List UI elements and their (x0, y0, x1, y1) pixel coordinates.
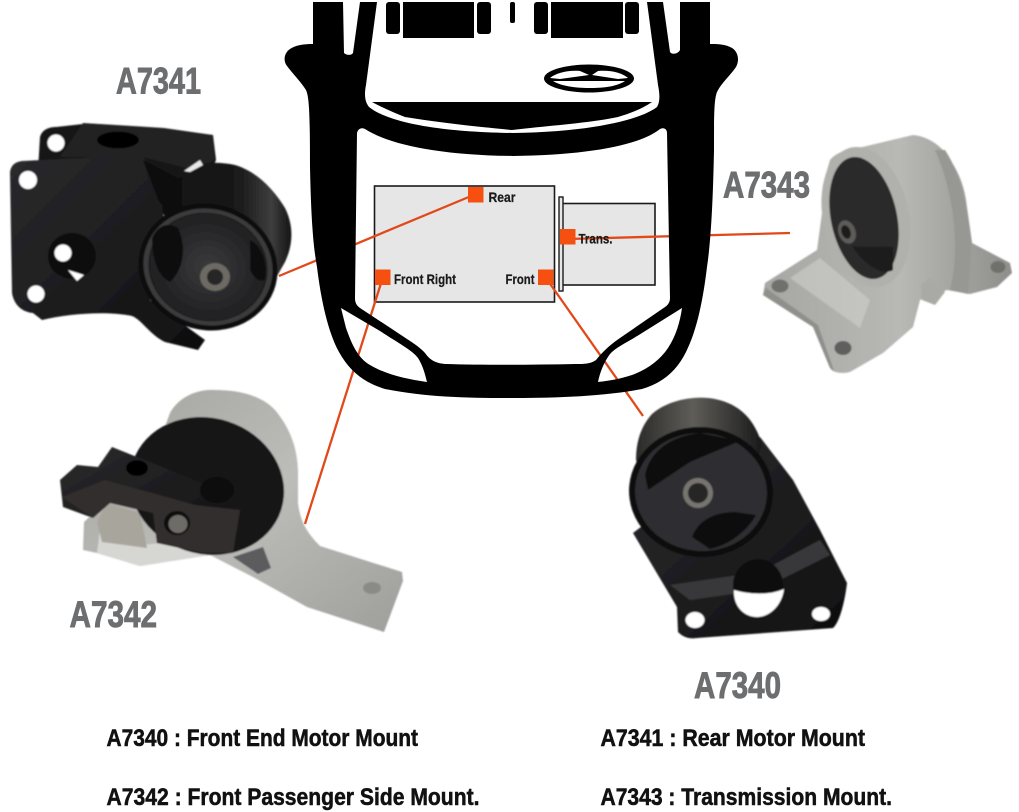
label: A7342: A7342 (70, 594, 157, 635)
label: A7341: A7341 (116, 60, 201, 102)
windshield dark panel (372, 102, 652, 130)
part photo: A7340 black mount (624, 398, 847, 638)
car silhouette (285, 2, 738, 398)
marker: front right (375, 270, 456, 287)
label: A7343: A7343 (723, 164, 810, 206)
engine diagram: transmission block (559, 197, 655, 291)
part photo: A7342 silver mount (60, 390, 403, 632)
marker: front: Front (506, 271, 535, 287)
key: A7341: A7341 : Rear Motor Mount (600, 725, 865, 752)
leader lines (279, 194, 790, 524)
marker: rear (468, 187, 516, 205)
marker: transmission (560, 229, 612, 246)
wiper and grille blocks (386, 2, 639, 38)
marker: front right: Front Right (394, 271, 456, 287)
part photo: A7343 silver mount (763, 135, 1012, 373)
marker: rear: Rear (488, 189, 516, 205)
key: A7342: A7342 : Front Passenger Side Mount. (106, 784, 480, 811)
key: A7343: A7343 : Transmission Mount. (600, 784, 892, 811)
marker: front (506, 270, 554, 287)
car badge (544, 64, 634, 92)
key: A7340: A7340 : Front End Motor Mount (106, 725, 418, 752)
engine diagram: engine block (374, 186, 554, 302)
marker: transmission: Trans. (578, 230, 612, 246)
label: A7340: A7340 (694, 665, 781, 706)
part photo: A7341 black mount (10, 123, 292, 350)
